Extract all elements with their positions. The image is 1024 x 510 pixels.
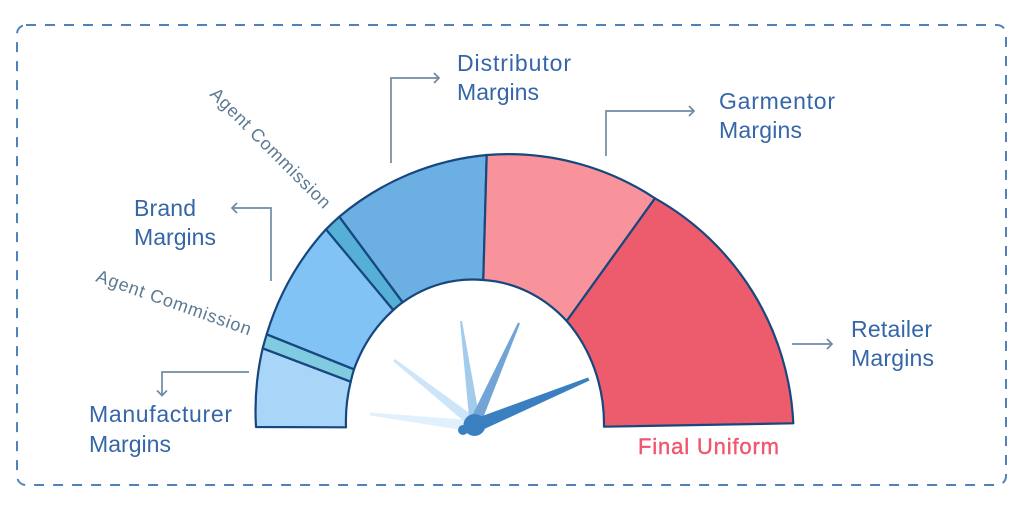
- label: final uniform: Final Uniform: [638, 434, 779, 459]
- arrow: retailer: [792, 339, 832, 349]
- arrow: manufacturer: [157, 372, 249, 396]
- label: distributor margins: Margins: [457, 79, 539, 105]
- needle: position 2: [393, 359, 472, 423]
- needle hub: [458, 414, 486, 436]
- label: garmentor margins: Garmentor: [719, 88, 835, 114]
- label: garmentor margins: Margins: [719, 117, 802, 143]
- label: manufacturer margins: Manufacturer: [89, 401, 232, 427]
- label: retailer margins: Retailer: [851, 316, 932, 342]
- label: distributor margins: Distributor: [457, 50, 571, 76]
- label: retailer margins: Margins: [851, 345, 934, 371]
- label: agent commission lower: Agent Commission: [94, 266, 254, 339]
- needle: position 4: [473, 322, 520, 418]
- arrow: brand: [232, 203, 271, 281]
- segment: garmentor margins: [483, 154, 655, 321]
- callout: garmentor margins: [606, 88, 835, 156]
- arrow: garmentor: [606, 106, 694, 156]
- segment: retailer margins: [567, 198, 793, 427]
- needle: position 1: [370, 412, 470, 431]
- callout: brand margins: [134, 195, 271, 281]
- callout: retailer margins: [792, 316, 934, 371]
- segment: distributor margins: [339, 155, 487, 302]
- gauge needles: [370, 321, 590, 436]
- needle: position 5: [474, 378, 590, 431]
- label: brand margins: Margins: [134, 224, 216, 250]
- callout: manufacturer margins: [89, 372, 249, 457]
- segment: agent commission 2: [326, 217, 403, 310]
- segment: agent commission 1: [263, 334, 354, 382]
- segment: manufacturer margins: [256, 348, 351, 427]
- needle: position 3: [460, 321, 479, 417]
- label: agent commission upper: Agent Commission: [206, 84, 335, 212]
- label: manufacturer margins: Margins: [89, 431, 171, 457]
- segment: brand margins: [267, 229, 393, 369]
- label: brand margins: Brand: [134, 195, 196, 221]
- callout: distributor margins: [391, 50, 571, 163]
- gauge: [256, 154, 793, 427]
- arrow: distributor: [391, 73, 439, 163]
